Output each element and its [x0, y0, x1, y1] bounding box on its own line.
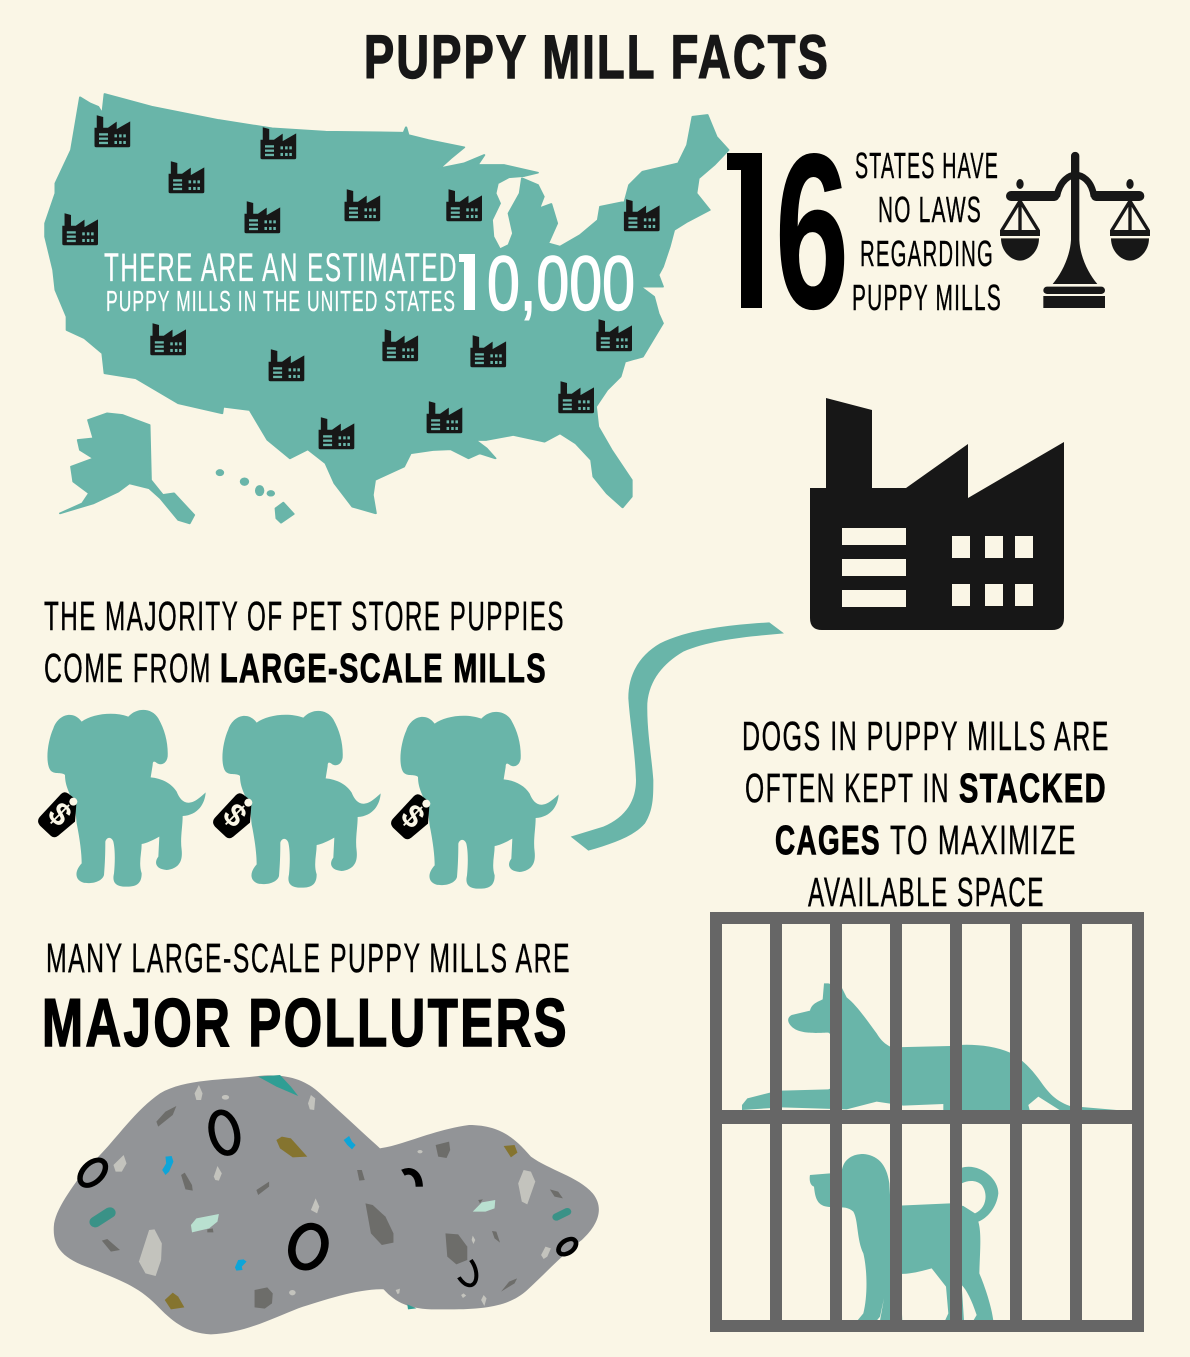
map silhouette: [45, 94, 728, 523]
arrow: curved ribbon from factory to puppies: [571, 622, 784, 851]
puppy 2: [213, 711, 381, 888]
stat text: NO LAWS: [878, 189, 982, 230]
panel: US map with factories: [45, 94, 728, 523]
big number: 6: [775, 108, 849, 356]
text: stacked cages: STACKED: [959, 765, 1107, 811]
big number: [727, 153, 844, 310]
stat: 16 states: [727, 152, 1000, 310]
puppy 3: $: [394, 797, 432, 835]
stat text: REGARDING: [860, 233, 994, 274]
light debris: [113, 1085, 551, 1306]
icon: scales of justice: [1000, 152, 1150, 308]
icon: large factory: [810, 398, 1064, 630]
text: pet store puppies: [44, 593, 565, 691]
text: stacked cages: OFTEN KEPT IN: [745, 765, 950, 811]
dog standing: [810, 1154, 998, 1321]
puppy 2: $: [216, 796, 254, 834]
map caption: THERE ARE AN ESTIMATED: [104, 246, 458, 290]
olive debris: [165, 1137, 517, 1309]
stat text: [852, 145, 1002, 318]
text: polluters: [42, 935, 571, 1061]
dog lying: [742, 983, 1117, 1111]
stat text: STATES HAVE: [855, 145, 999, 186]
text: stacked cages: [742, 713, 1110, 915]
panel: stacked cage with dogs: [710, 912, 1144, 1332]
puppy 1: [38, 710, 206, 887]
factory markers: [62, 115, 660, 449]
map caption: [104, 253, 634, 320]
text: stacked cages: TO MAXIMIZE: [890, 817, 1077, 863]
map caption: PUPPY MILLS IN THE UNITED STATES: [106, 286, 456, 318]
puppy 3: [391, 712, 559, 889]
teal debris: [95, 1075, 567, 1309]
title: PUPPY MILL FACTS: [364, 23, 830, 91]
text: pet store puppies: LARGE-SCALE MILLS: [220, 645, 547, 691]
map caption: 1: [448, 241, 480, 327]
text: pet store puppies: THE MAJORITY OF PET STORE PUPPIES: [44, 593, 565, 639]
black rings: [75, 1110, 579, 1285]
big number: 1: [720, 113, 782, 354]
text: stacked cages: CAGES: [775, 817, 881, 863]
cage bars: [710, 912, 1144, 1332]
blue debris: [162, 1136, 356, 1271]
puppies with price tags: [38, 710, 559, 889]
text: polluters: MAJOR POLLUTERS: [42, 985, 569, 1061]
puppy 1: $: [41, 795, 79, 833]
panel: polluted waste pond: [54, 1075, 599, 1334]
dark debris: [102, 1106, 563, 1309]
mint debris: [191, 1200, 495, 1232]
stat text: PUPPY MILLS: [852, 277, 1002, 318]
text: pet store puppies: COME FROM: [44, 645, 212, 691]
map caption: 0,000: [487, 241, 635, 327]
text: polluters: MANY LARGE-SCALE PUPPY MILLS ARE: [46, 935, 571, 981]
pond shape: [54, 1075, 599, 1334]
